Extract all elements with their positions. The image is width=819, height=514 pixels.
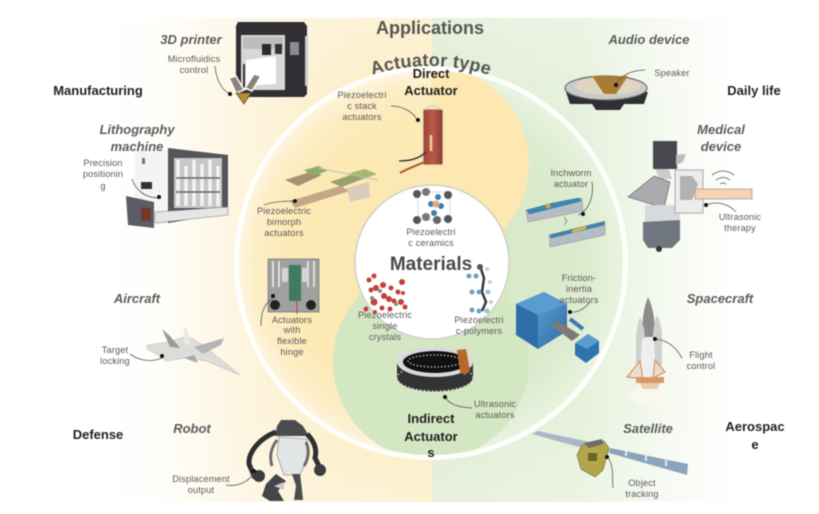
label: piezoelectric bimorph actuators: actuators bbox=[264, 228, 304, 238]
label: friction-inertia actuators: actuators bbox=[559, 295, 599, 305]
label: displacement output: Displacement bbox=[172, 474, 230, 484]
label: piezoelectric bimorph actuators: Piezoelectric bbox=[257, 206, 311, 216]
label: piezoelectric single crystals: single bbox=[373, 321, 397, 331]
label: piezoelectric stack actuators: c stack bbox=[347, 101, 377, 111]
icon: space shuttle bbox=[627, 297, 682, 405]
label: microfluidics control: Microfluidics bbox=[168, 54, 220, 64]
label: precision positioning: Precision bbox=[83, 158, 123, 168]
label: ultrasonic therapy: Ultrasonic bbox=[719, 212, 761, 222]
heading: direct actuator: Direct bbox=[413, 66, 450, 81]
heading: manufacturing: Manufacturing bbox=[53, 83, 143, 98]
label: actuators with flexible hinge: with bbox=[283, 325, 300, 335]
label: inchworm actuator: Inchworm bbox=[550, 168, 592, 178]
label: microfluidics control: control bbox=[180, 65, 208, 75]
heading: aerospace: e bbox=[751, 437, 759, 452]
label: displacement output: output bbox=[188, 485, 215, 495]
label: lithography machine: Lithography bbox=[99, 122, 175, 137]
label: actuators with flexible hinge: Actuators bbox=[272, 315, 312, 325]
label: flight control: Flight bbox=[689, 350, 713, 360]
heading: daily life: Daily life bbox=[727, 83, 781, 98]
heading: direct actuator: Actuator bbox=[404, 83, 458, 98]
heading: defense: Defense bbox=[73, 427, 123, 442]
label: piezoelectric stack actuators: actuators bbox=[342, 112, 382, 122]
direct actuator yellow lobe bbox=[430, 70, 530, 230]
icon: satellite bbox=[532, 431, 688, 488]
icon: bimorph actuator bbox=[264, 166, 378, 208]
panel: daily life and aerospace background bbox=[432, 18, 735, 502]
label: piezoelectric bimorph actuators: bimorph bbox=[267, 217, 301, 227]
label: flight control: control bbox=[687, 361, 715, 371]
label: medical device: device bbox=[701, 139, 741, 154]
heading: applications: Applications bbox=[376, 18, 484, 38]
label: piezoelectric ceramics: c ceramics bbox=[408, 238, 454, 248]
icon: robot bbox=[226, 420, 326, 501]
icon: lithography machine bbox=[126, 148, 228, 228]
icon: flexible hinge actuator bbox=[261, 259, 319, 326]
label: robot: Robot bbox=[173, 421, 211, 436]
label: precision positioning: positionin bbox=[83, 169, 123, 179]
panel: manufacturing and defense background bbox=[110, 18, 432, 502]
icon: piezoelectric stack actuator bbox=[391, 106, 443, 173]
panel: materials circle bbox=[355, 185, 509, 339]
indirect actuator green lobe bbox=[332, 294, 528, 456]
label: aircraft: Aircraft bbox=[113, 291, 161, 306]
label: precision positioning: g bbox=[100, 181, 106, 191]
icon: speaker bbox=[565, 70, 648, 110]
icon: aircraft bbox=[130, 325, 240, 375]
label: target locking: Target bbox=[102, 345, 129, 355]
label: ultrasonic actuators: actuators bbox=[475, 410, 515, 420]
label: lithography machine: machine bbox=[111, 139, 163, 154]
heading: aerospace: Aerospac bbox=[725, 419, 785, 434]
icon: polymer chain bbox=[466, 264, 493, 314]
label: object tracking: Object bbox=[628, 478, 656, 488]
label: object tracking: tracking bbox=[625, 489, 659, 499]
label: satellite: Satellite bbox=[623, 421, 673, 436]
icon: inchworm actuator bbox=[526, 182, 605, 247]
heading: actuator type: Actuator type bbox=[372, 54, 491, 75]
label: spacecraft: Spacecraft bbox=[687, 291, 754, 306]
label: ultrasonic actuators: Ultrasonic bbox=[474, 399, 516, 409]
label: piezoelectric single crystals: crystals bbox=[369, 332, 401, 342]
label: piezoelectric single crystals: Piezoelectric bbox=[358, 310, 412, 320]
label: friction-inertia actuators: Friction- bbox=[562, 273, 596, 283]
icon: 3D printer bbox=[215, 22, 308, 104]
label: inchworm actuator: actuator bbox=[554, 179, 588, 189]
label: piezoelectric polymers: c-polymers bbox=[456, 326, 502, 336]
icon: ceramics crystal lattice bbox=[413, 188, 452, 224]
label: friction-inertia actuators: inertia bbox=[566, 284, 593, 294]
heading: indirect actuators: Indirect bbox=[408, 411, 455, 426]
label: ultrasonic therapy: therapy bbox=[724, 223, 756, 233]
heading: indirect actuators: s bbox=[427, 445, 435, 460]
label: speaker: Speaker bbox=[654, 68, 690, 78]
label: actuators with flexible hinge: hinge bbox=[280, 347, 304, 357]
label: piezoelectric stack actuators: Piezoelectri bbox=[337, 90, 387, 100]
label: piezoelectric ceramics: Piezoelectri bbox=[406, 227, 456, 237]
label: medical device: Medical bbox=[697, 122, 745, 137]
heading: materials: Materials bbox=[390, 254, 472, 275]
icon: ultrasound machine bbox=[628, 141, 752, 252]
label: piezoelectric polymers: Piezoelectri bbox=[454, 315, 504, 325]
icon: ultrasonic actuator ring bbox=[397, 347, 473, 408]
label: target locking: locking bbox=[100, 356, 130, 366]
icon: friction-inertia actuator bbox=[516, 292, 599, 363]
label: audio device: Audio device bbox=[608, 32, 689, 47]
heading: indirect actuators: Actuator bbox=[404, 429, 458, 444]
label: 3D printer: 3D printer bbox=[160, 32, 223, 47]
panel: actuator type ring bbox=[230, 60, 641, 470]
icon: single crystals bbox=[364, 274, 408, 314]
label: actuators with flexible hinge: flexible bbox=[277, 336, 307, 346]
